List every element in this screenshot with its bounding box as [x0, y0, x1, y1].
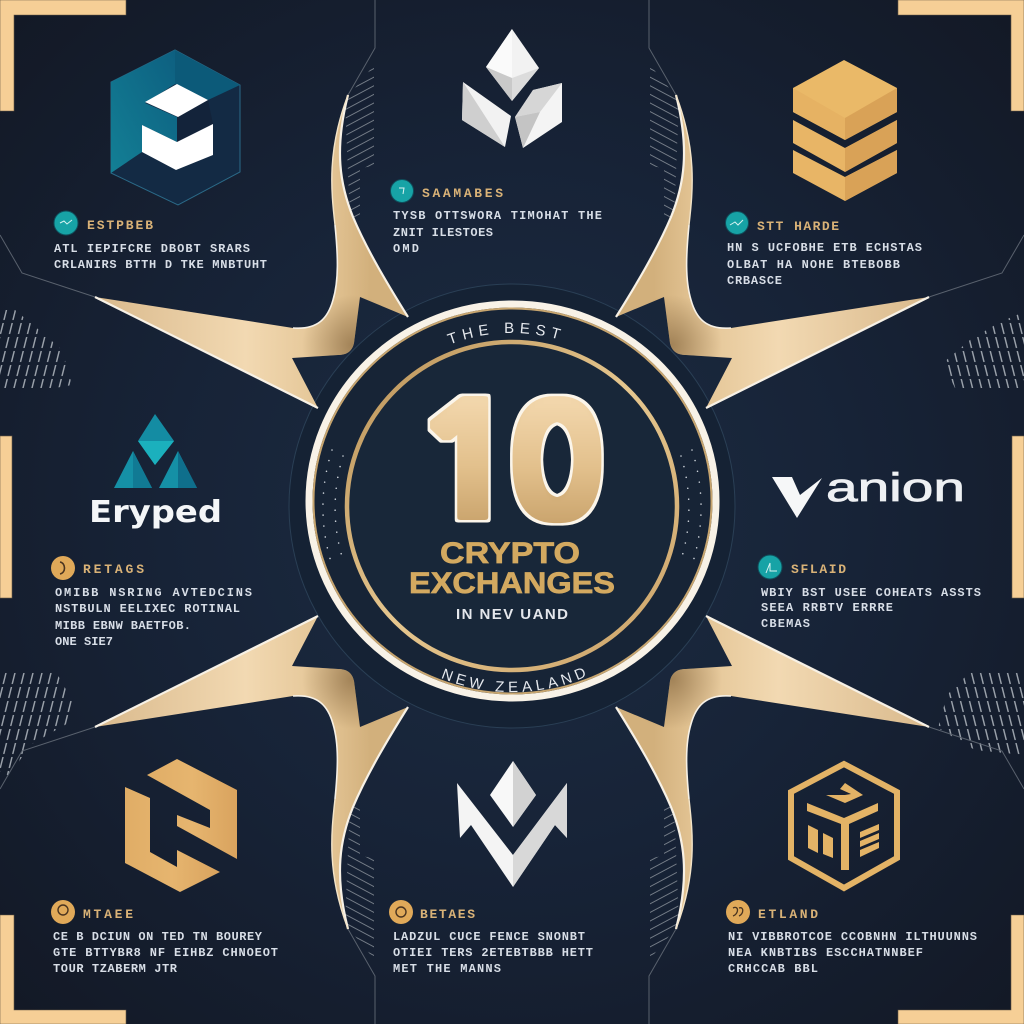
star arm: bottom left	[0, 616, 408, 1024]
ring inner gold edge	[314, 308, 712, 694]
hatch pattern: upper right	[943, 312, 1024, 388]
description	[54, 242, 267, 272]
curved heading: new zealand: NEW ZEALAND	[442, 668, 585, 692]
description: MET THE MANNS	[393, 962, 501, 976]
star arm: top right	[616, 0, 1024, 408]
panel: top left exchange	[54, 50, 267, 272]
arc guide: top	[339, 333, 685, 506]
star arm: bottom right	[616, 616, 1024, 1024]
dot columns right	[681, 450, 701, 565]
logo: white diamond and chevron	[457, 761, 567, 887]
icon: gold badge	[726, 900, 750, 924]
logo: gold stack	[793, 60, 897, 201]
star arm: top left	[0, 0, 408, 408]
gold inner ring	[347, 342, 677, 670]
description: ONE SIE7	[55, 635, 113, 649]
description: OMIBB NSRING AVTEDCINS	[55, 586, 252, 600]
label: RETAGS	[83, 562, 144, 577]
hatch pattern: lower left	[0, 672, 72, 775]
description: HN S UCFOBHE ETB ECHSTAS	[727, 241, 922, 255]
big number 10	[414, 387, 604, 540]
description: CBEMAS	[761, 617, 810, 631]
heading: crypto: CRYPTO	[440, 537, 580, 570]
panel: top right exchange	[726, 60, 922, 288]
description: WBIY BST USEE COHEATS ASSTS	[761, 586, 981, 600]
label: SAAMABES	[422, 186, 503, 201]
icon: teal badge	[758, 555, 782, 579]
description: OTIEI TERS 2ETEBTBBB HETT	[393, 946, 593, 960]
description: SEEA RRBTV ERRRE	[761, 601, 893, 615]
description: ATL IEPIFCRE DBOBT SRARS	[54, 242, 250, 256]
description	[761, 586, 981, 631]
description: CRHCCAB BBL	[728, 962, 818, 976]
icon: teal badge	[390, 180, 414, 202]
description: NSTBULN EELIXEC ROTINAL	[55, 602, 240, 616]
description: CRBASCE	[727, 274, 782, 288]
description: NEA KNBTIBS ESCCHATNNBEF	[728, 946, 923, 960]
description: TYSB OTTSWORA TIMOHAT THE	[393, 209, 602, 223]
description: CE B DCIUN ON TED TN BOUREY	[53, 930, 263, 944]
description: TOUR TZABERM JTR	[53, 962, 178, 976]
corner bracket: bottom left	[0, 915, 126, 1024]
description: ZNIT ILESTOES	[393, 226, 493, 240]
logo wordmark: Eryped	[89, 495, 222, 530]
outer ring	[309, 304, 716, 698]
subheading: IN NEV UAND	[456, 606, 568, 623]
panel: top centre exchange	[390, 29, 602, 256]
corner bracket: top left	[0, 0, 126, 111]
label: SFLAID	[791, 562, 846, 577]
arc guide: bottom	[326, 506, 698, 692]
icon: teal badge	[726, 212, 748, 234]
description	[53, 930, 278, 976]
panel: right exchange	[758, 466, 981, 631]
description: OMD	[393, 242, 419, 256]
label: BETAES	[420, 907, 475, 922]
icon: gold badge	[389, 900, 413, 924]
corner bracket: bottom right	[898, 915, 1024, 1024]
description	[393, 930, 593, 976]
panel: bottom centre exchange	[389, 761, 593, 976]
description: GTE BTTYBR8 NF EIHBZ CHNOEOT	[53, 946, 278, 960]
description: NI VIBBROTCOE CCOBNHN ILTHUUNNS	[728, 930, 977, 944]
logo: gold outlined cube	[791, 764, 897, 888]
description	[728, 930, 977, 976]
dot columns left	[323, 450, 343, 565]
description	[393, 209, 602, 256]
description: OLBAT HA NOHE BTEBOBB	[727, 258, 900, 272]
description: MIBB EBNW BAETFOB.	[55, 619, 191, 633]
big number 10: 1	[414, 387, 524, 539]
label: MTAEE	[83, 907, 133, 922]
icon: gold badge	[51, 556, 75, 580]
label: STT HARDE	[757, 219, 839, 234]
panel: left exchange	[51, 414, 252, 649]
dark halo behind medallion	[289, 284, 735, 728]
logo: teal hexagon	[111, 50, 240, 205]
corner bracket: top right	[898, 0, 1024, 111]
label: ETLAND	[758, 907, 818, 922]
hatch pattern: upper left	[0, 310, 72, 388]
description	[55, 586, 252, 649]
description: CRLANIRS BTTH D TKE MNBTUHT	[54, 258, 267, 272]
logo: V mark	[772, 477, 822, 518]
logo: teal triangles	[114, 414, 197, 488]
central medallion	[306, 300, 720, 702]
logo wordmark: anion	[826, 466, 965, 510]
logo: white crystals	[462, 29, 562, 148]
logo: gold P hexagon	[125, 759, 237, 892]
panel: bottom right exchange	[726, 764, 977, 976]
panel: bottom left exchange	[51, 759, 278, 976]
hatch pattern: lower right	[938, 672, 1024, 755]
icon: teal badge	[54, 211, 78, 235]
side bracket: left	[0, 436, 12, 598]
icon: gold badge	[51, 900, 75, 924]
label: ESTPBEB	[87, 218, 153, 233]
side bracket: right	[1012, 436, 1024, 598]
description: LADZUL CUCE FENCE SNONBT	[393, 930, 585, 944]
big number 10: 0	[506, 388, 604, 540]
description	[727, 241, 922, 288]
heading: exchanges: EXCHANGES	[409, 567, 615, 600]
curved heading: the best: THE BEST	[446, 322, 562, 344]
